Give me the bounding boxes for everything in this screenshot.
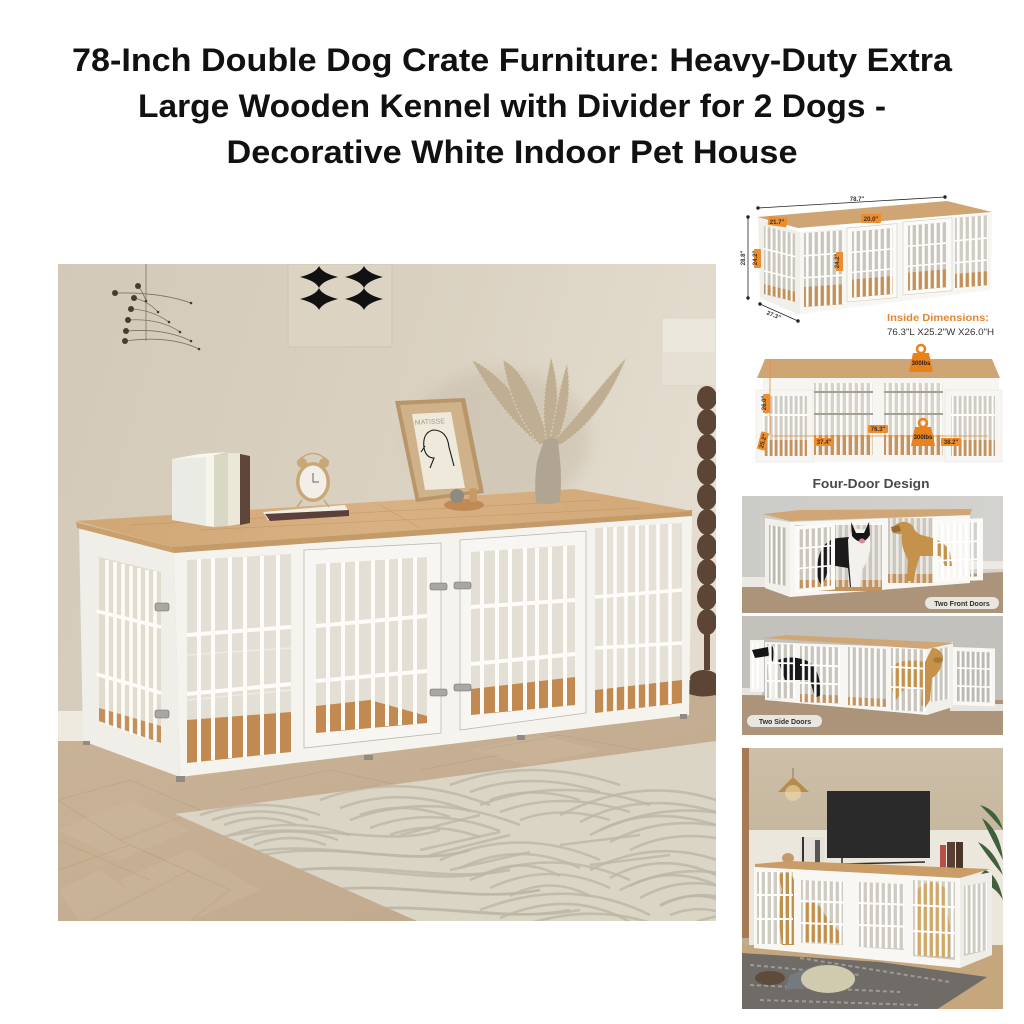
- front panel left: [187, 554, 291, 763]
- feet: [83, 714, 687, 782]
- dimension labels: 27.3": [766, 311, 781, 322]
- floor: [58, 690, 716, 921]
- front bars over dogs: [767, 644, 925, 712]
- orange size labels: 25.2": [759, 433, 769, 449]
- title: Decorative White Indoor Pet House: [226, 134, 798, 170]
- baseboard: [58, 711, 83, 741]
- television: [827, 791, 930, 864]
- orange size labels: [757, 394, 961, 451]
- open side door left: [750, 640, 764, 692]
- crate with open doors: [756, 359, 1002, 462]
- orange size labels: 38.2": [944, 440, 958, 446]
- top view crate: [757, 201, 992, 315]
- crate: [763, 635, 955, 715]
- floor and rug: [742, 945, 1003, 1012]
- side window: [96, 557, 161, 743]
- pill label: Two Side Doors: [759, 719, 811, 726]
- inside dimensions text: [887, 312, 994, 338]
- open side door right: [953, 647, 995, 706]
- orange size labels: 76.3": [871, 427, 885, 433]
- shadow on wall behind decor: [432, 372, 588, 496]
- cage bars: [757, 872, 988, 957]
- framed Matisse print: [395, 398, 484, 502]
- crate: [763, 509, 972, 597]
- front door 2: [460, 531, 586, 730]
- weight icon: bottom: [911, 419, 935, 446]
- orange size labels: 26.0": [762, 396, 768, 410]
- pampas grass: [472, 357, 626, 445]
- door latches: [155, 582, 471, 718]
- inside dimensions text: Inside Dimensions:: [887, 312, 989, 324]
- dimension labels: 20.0": [864, 217, 878, 223]
- title: [72, 42, 952, 170]
- border collie: [752, 645, 821, 700]
- dimension labels: 28.8": [741, 251, 747, 265]
- crate body front: [174, 514, 692, 777]
- main photo: white crate in living room: [58, 264, 760, 942]
- alarm clock: [296, 454, 330, 507]
- herringbone floor planks: [58, 735, 640, 897]
- orange dimension lines: [770, 360, 988, 436]
- vase: [535, 438, 561, 504]
- crate: [754, 861, 992, 968]
- golden dogs: [778, 872, 950, 958]
- weight icon: top: [909, 345, 933, 372]
- product photo: two side doors: [742, 616, 1003, 735]
- hanging wall mobile: [112, 264, 200, 350]
- border collie: [817, 522, 870, 587]
- books: [172, 452, 250, 527]
- inside dimensions text: 76.3"L X25.2"W X26.0"H: [887, 327, 994, 338]
- white crate: [76, 489, 692, 782]
- dimension labels: 78.7": [850, 197, 864, 203]
- caption: four-door design: Four-Door Design: [812, 476, 930, 491]
- product photo: two front doors: [742, 496, 1003, 613]
- orange size labels: 37.4": [817, 440, 831, 446]
- floor cushions: [755, 963, 855, 993]
- rug with wave pattern: [175, 741, 716, 921]
- title: Large Wooden Kennel with Divider for 2 Dogs -: [138, 88, 886, 124]
- dimension labels: [741, 197, 881, 322]
- pill label: [925, 597, 999, 609]
- weight icon: top: 300lbs: [912, 361, 931, 367]
- dimension labels: 24.2": [753, 251, 759, 265]
- door 2 frame: [903, 218, 952, 295]
- open doors: [797, 520, 981, 591]
- dimension labels: 21.7": [770, 220, 784, 226]
- golden retriever: [892, 648, 943, 708]
- crate body side: [79, 526, 180, 777]
- tabletop: [76, 489, 692, 553]
- wall art with four stars: [288, 264, 392, 347]
- door 1 frame: [847, 224, 897, 302]
- title: 78-Inch Double Dog Crate Furniture: Heavy-Duty Extra: [72, 42, 952, 78]
- product image: dimensions diagram: [741, 196, 994, 338]
- front door 1: [304, 543, 441, 748]
- framed Matisse print: MATISSE: [415, 418, 446, 427]
- golden retriever: [891, 522, 952, 581]
- front panel right: [595, 523, 682, 713]
- floor lamp with beaded stand: [662, 318, 719, 696]
- small books under clock: [263, 505, 349, 521]
- plant: [975, 805, 1003, 900]
- books and bottles: [782, 837, 963, 868]
- white wainscot: [749, 830, 1003, 945]
- dimension lines: [747, 196, 946, 322]
- pill label: Two Front Doors: [934, 601, 990, 608]
- weight icon: bottom: 300lbs: [914, 435, 933, 441]
- product photo: crate as TV stand: [742, 748, 1003, 1012]
- pendant lamp: [778, 768, 809, 801]
- dimension labels: 24.2": [835, 254, 841, 268]
- pill label: [747, 715, 822, 727]
- headphones on bowl: [444, 488, 484, 511]
- product image: four-door open with 300lbs load: [756, 345, 1002, 462]
